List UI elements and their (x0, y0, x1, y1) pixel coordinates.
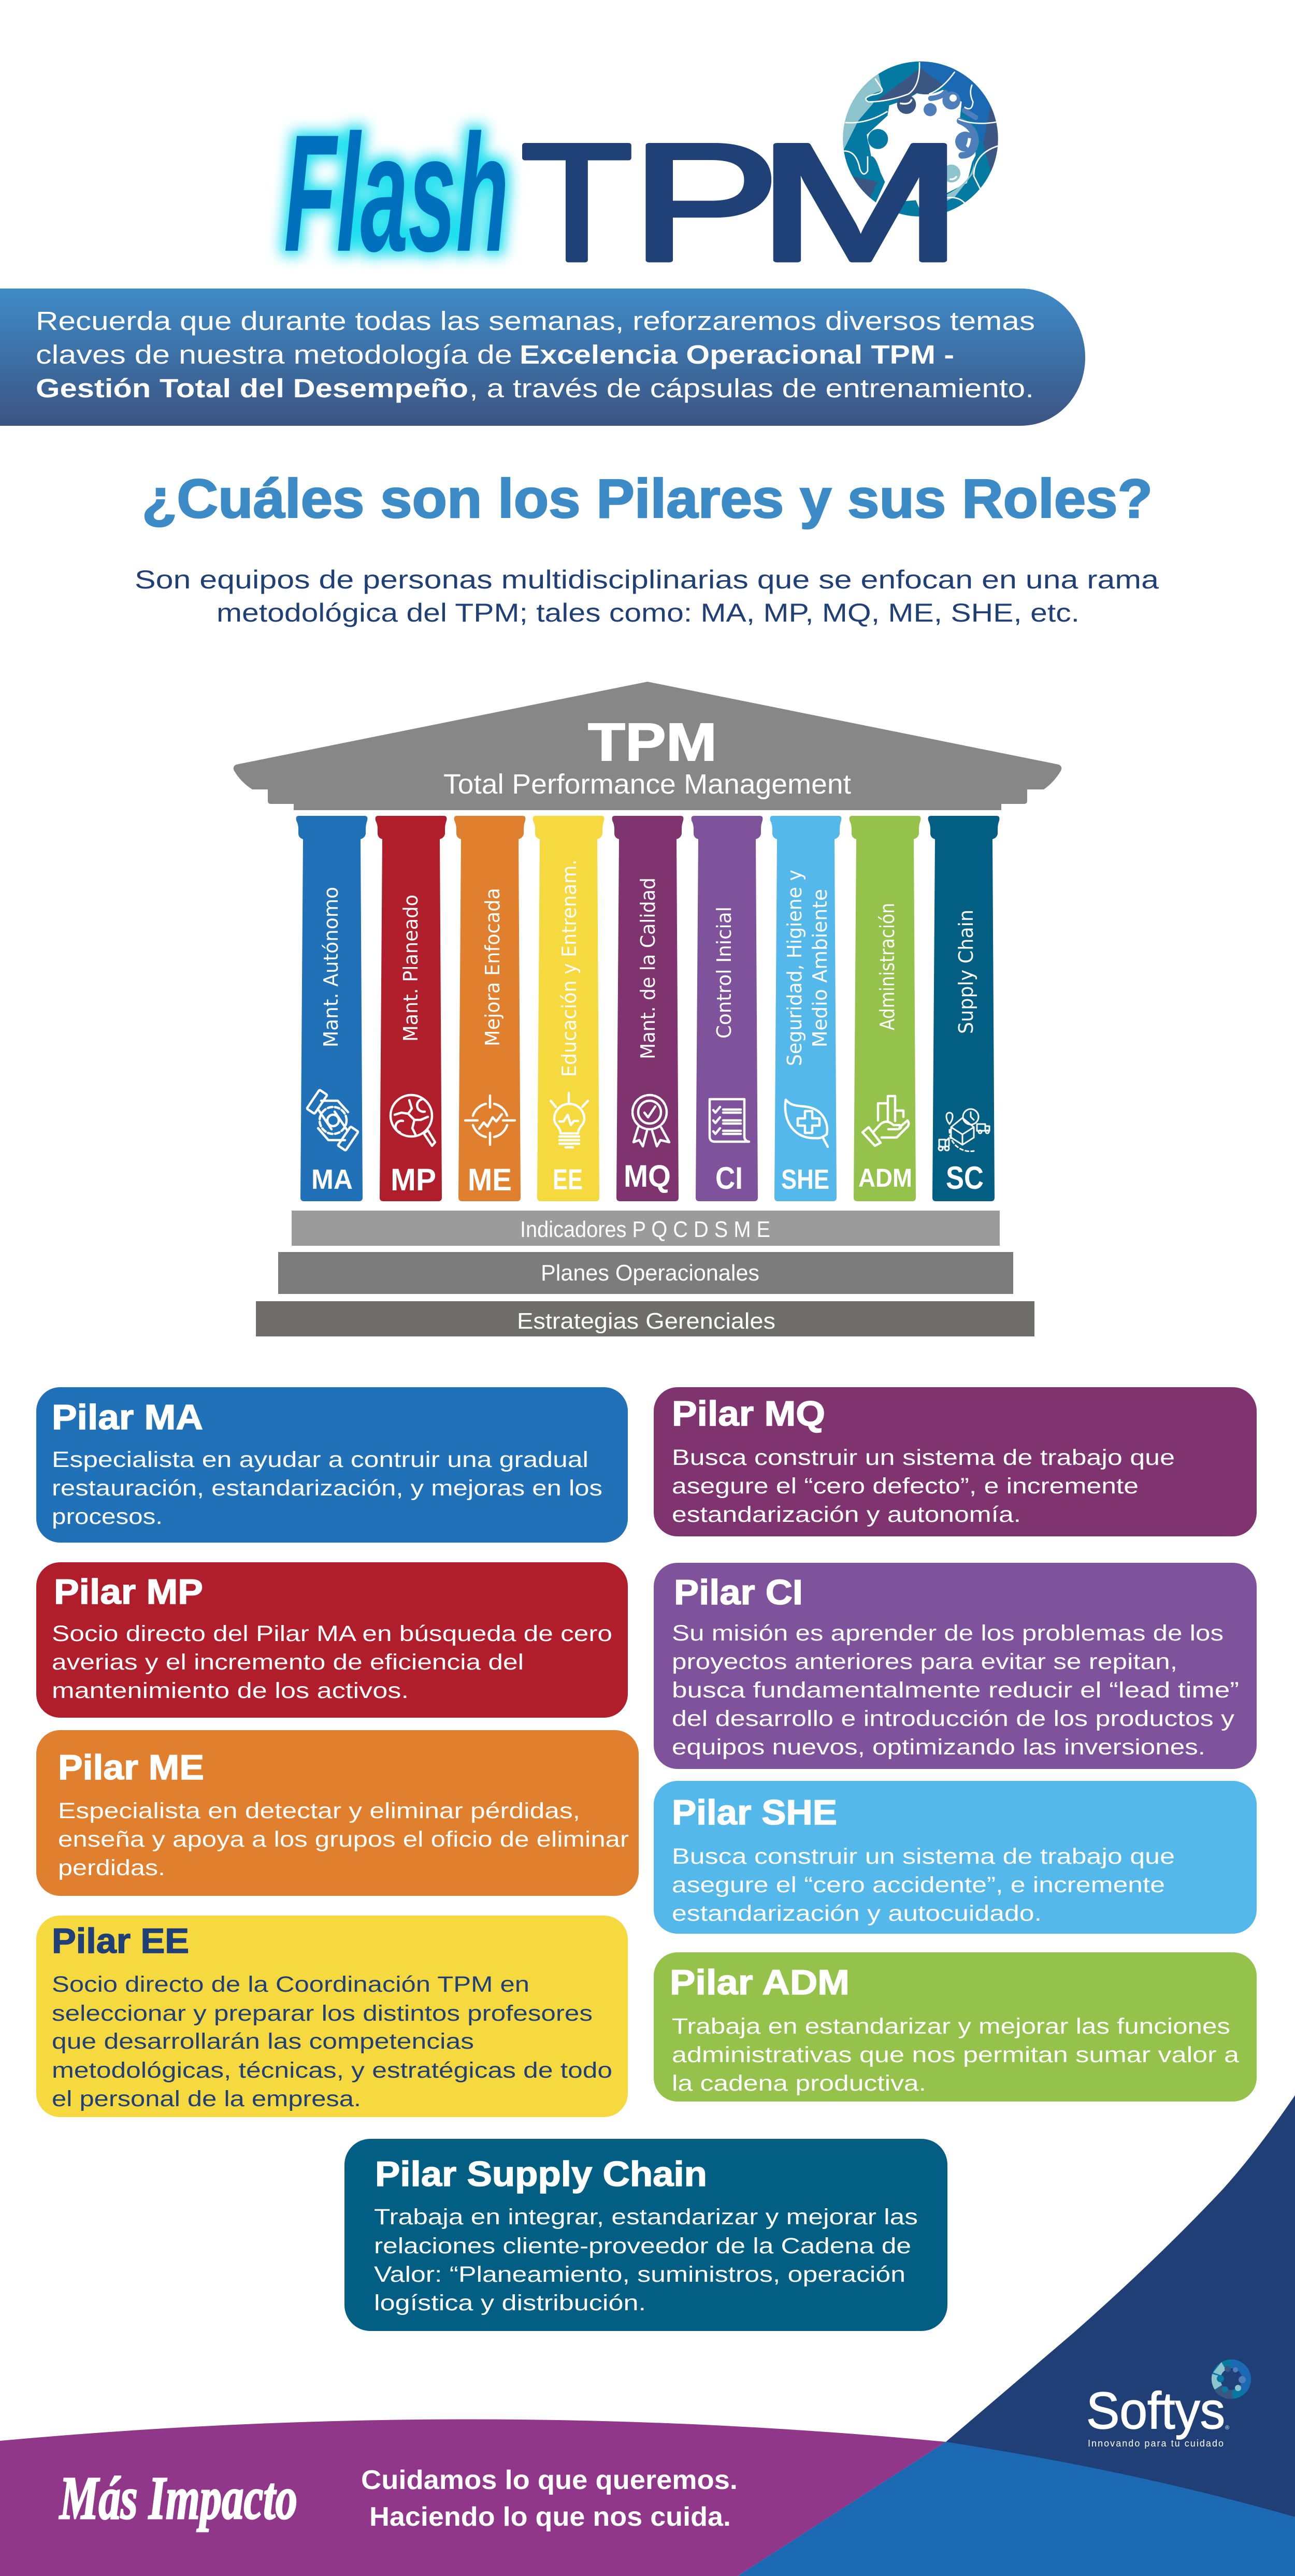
panel: Pilar SHE: asegure el “cero accidente”, e incremente (672, 1873, 1165, 1897)
panel: Pilar CI: equipos nuevos, optimizando las inversiones. (672, 1735, 1205, 1760)
wordmark: Flash: Flash (284, 100, 509, 286)
pillar ME: Mejora Enfocada (481, 888, 504, 1046)
footer band: blue (738, 2442, 1295, 2576)
icon: magnifier with cracks (391, 1095, 435, 1146)
panel: Pilar EE: Pilar EE (52, 1921, 189, 1961)
pillar EE (533, 816, 604, 1201)
base step: indicators: Indicadores P Q C D S M E (520, 1217, 770, 1242)
panel: Pilar MQ (654, 1387, 1257, 1536)
panel: Pilar ADM: Trabaja en estandarizar y mejorar las funciones (672, 2014, 1230, 2039)
panel: Pilar EE (36, 1916, 628, 2117)
intro banner (0, 289, 1085, 426)
wordmark: TPM: P (630, 110, 780, 296)
roof subtitle: Total Performance Management (443, 769, 851, 800)
background wedge: navy corner (946, 2095, 1295, 2517)
intro text: , a través de cápsulas de entrenamiento. (469, 373, 1034, 403)
panel: Pilar Supply Chain: Pilar Supply Chain (375, 2154, 707, 2194)
panel: Pilar ME (36, 1730, 639, 1896)
panel: Pilar MA: Pilar MA (52, 1398, 203, 1437)
logo: Flash TPM (284, 57, 1003, 296)
subtitle: metodológica del TPM; tales como: MA, MP, MQ, ME, SHE, etc. (217, 598, 1080, 627)
panel: Pilar EE: Socio directo de la Coordinación TPM en (52, 1972, 529, 1997)
pillar MP: Mant. Planeado (399, 895, 422, 1042)
icon: target with chart (465, 1096, 515, 1145)
panel: Pilar MP: Socio directo del Pilar MA en búsqueda de cero (52, 1621, 612, 1646)
pillar MQ (612, 816, 683, 1201)
icon: hand with bars (862, 1096, 909, 1146)
panel: Pilar Supply Chain: logística y distribución. (374, 2291, 646, 2315)
pillar ME: ME (468, 1162, 512, 1197)
icon: leaf with cross (785, 1100, 828, 1147)
panel: Pilar MP (36, 1562, 628, 1718)
pillar SHE (770, 816, 841, 1201)
subtitle: Son equipos de personas multidisciplinarias que se enfocan en una rama (135, 565, 1159, 594)
intro text: Gestión Total del Desempeño (36, 373, 468, 403)
base step: indicators (292, 1211, 1000, 1246)
panel: Pilar MQ: Pilar MQ (672, 1394, 825, 1433)
Softys logo (1086, 2359, 1251, 2449)
wordmark: TPM: T (521, 110, 633, 296)
pillar MQ: MQ (624, 1159, 671, 1193)
pillar CI (692, 816, 762, 1201)
panel: Pilar MP: Pilar MP (54, 1572, 203, 1611)
panel: Pilar Supply Chain: Valor: “Planeamiento, suministros, operación (374, 2262, 905, 2287)
icon: logistics box (939, 1109, 989, 1152)
panel: Pilar MQ: Busca construir un sistema de trabajo que (672, 1445, 1175, 1470)
Softys logo: ® (1225, 2425, 1229, 2431)
icon: small globe (1212, 2359, 1251, 2399)
panel: Pilar EE: que desarrollarán las competencias (52, 2029, 474, 2054)
pillar SC: Supply Chain (955, 910, 977, 1034)
panel: Pilar ME: enseña y apoya a los grupos el oficio de eliminar (58, 1827, 629, 1852)
panel: Pilar MA: restauración, estandarización, y mejoras en los (52, 1476, 602, 1501)
panel: Pilar MP: averias y el incremento de eficiencia del (52, 1650, 524, 1675)
panel: Pilar ADM: administrativas que nos permitan sumar valor a (672, 2042, 1239, 2067)
wordmark: TPM: M (756, 110, 964, 296)
panel: Pilar Supply Chain (344, 2139, 947, 2331)
pillar ME (454, 816, 525, 1201)
panel: Pilar CI: Su misión es aprender de los problemas de los (672, 1621, 1224, 1646)
base step: strategies: Estrategias Gerenciales (517, 1308, 775, 1334)
panel: Pilar ME: Especialista en detectar y eliminar pérdidas, (58, 1798, 580, 1823)
panel: Pilar CI: busca fundamentalmente reducir el “lead time” (672, 1678, 1239, 1703)
panel: Pilar SHE (654, 1781, 1257, 1934)
slogan: Haciendo lo que nos cuida. (369, 2502, 731, 2532)
pillar MP (376, 816, 447, 1201)
panel: Pilar ADM: Pilar ADM (670, 1963, 850, 2002)
panel: Pilar EE: el personal de la empresa. (52, 2086, 361, 2111)
panel: Pilar CI: Pilar CI (674, 1573, 803, 1612)
panel: Pilar CI: proyectos anteriores para evitar se repitan, (672, 1649, 1177, 1674)
intro text: Recuerda que durante todas las semanas, reforzaremos diversos temas (36, 306, 1035, 336)
panel: Pilar MA (36, 1387, 628, 1543)
icon: light bulb (551, 1093, 588, 1147)
panel: Pilar SHE: Busca construir un sistema de trabajo que (672, 1844, 1175, 1869)
panel: Pilar CI (654, 1563, 1257, 1769)
panel: Pilar MQ: asegure el “cero defecto”, e incremente (672, 1474, 1139, 1499)
panel: Pilar EE: metodológicas, técnicas, y estratégicas de todo (52, 2058, 612, 2083)
pillar MP: MP (391, 1162, 436, 1197)
panel: Pilar SHE: Pilar SHE (672, 1793, 837, 1832)
panel: Pilar ME: perdidas. (58, 1855, 165, 1880)
panel: Pilar EE: seleccionar y preparar los distintos profesores (52, 2001, 593, 2026)
panel: Pilar Supply Chain: relaciones cliente-proveedor de la Cadena de (374, 2234, 911, 2258)
Softys logo: Innovando para tu cuidado (1088, 2438, 1224, 2449)
pillar MA (296, 816, 367, 1201)
roof (234, 682, 1061, 810)
pillar SC: SC (946, 1160, 984, 1196)
pillar MQ: Mant. de la Calidad (637, 877, 659, 1059)
panel: Pilar ADM (654, 1952, 1257, 2102)
panel: Pilar MP: mantenimiento de los activos. (52, 1678, 409, 1703)
footer band: purple (0, 2419, 946, 2576)
Softys logo: Softys (1086, 2382, 1225, 2440)
icon: checklist (710, 1099, 749, 1142)
pillar CI: Control Inicial (713, 906, 736, 1039)
main heading: ¿Cuáles son los Pilares y sus Roles? (142, 468, 1153, 529)
pillar SHE: Medio Ambiente (809, 889, 831, 1047)
intro text: Excelencia Operacional TPM - (520, 340, 954, 369)
pillar MA: MA (311, 1164, 353, 1195)
icon: hands and gear (307, 1090, 358, 1150)
panel: Pilar ME: Pilar ME (58, 1748, 204, 1787)
icon: quality badge (632, 1095, 669, 1146)
pillar SHE: Seguridad, Higiene y (783, 870, 806, 1066)
pillar MA: Mant. Autónomo (320, 887, 342, 1047)
pillar ADM (850, 816, 920, 1201)
pillar SC (928, 816, 999, 1201)
panel: Pilar Supply Chain: Trabaja en integrar, estandarizar y mejorar las (374, 2205, 918, 2229)
panel: Pilar ADM: la cadena productiva. (672, 2071, 926, 2096)
intro text: claves de nuestra metodología de (36, 340, 512, 369)
pillar ADM: ADM (858, 1163, 912, 1192)
panel: Pilar CI: del desarrollo e introducción de los productos y (672, 1706, 1235, 1731)
pillar EE: Educación y Entrenam. (558, 859, 581, 1077)
pillar SHE: SHE (781, 1164, 829, 1195)
base step: strategies (256, 1301, 1034, 1336)
panel: Pilar MA: Especialista en ayudar a contruir una gradual (52, 1447, 588, 1472)
pillar ADM: Administración (876, 903, 899, 1030)
base step: plans (278, 1252, 1013, 1294)
panel: Pilar SHE: estandarización y autocuidado. (672, 1901, 1042, 1926)
temple diagram (234, 682, 1061, 1336)
panel: Pilar MA: procesos. (52, 1504, 163, 1529)
script label: Más Impacto: Más Impacto (59, 2464, 297, 2532)
icon: globe of people (843, 61, 998, 217)
panel: Pilar MQ: estandarización y autonomía. (672, 1502, 1021, 1527)
base step: plans: Planes Operacionales (541, 1260, 759, 1286)
slogan: Cuidamos lo que queremos. (361, 2465, 738, 2495)
pillar EE: EE (553, 1163, 583, 1196)
pillar CI: CI (715, 1161, 743, 1196)
roof title TPM: TPM (588, 712, 717, 772)
